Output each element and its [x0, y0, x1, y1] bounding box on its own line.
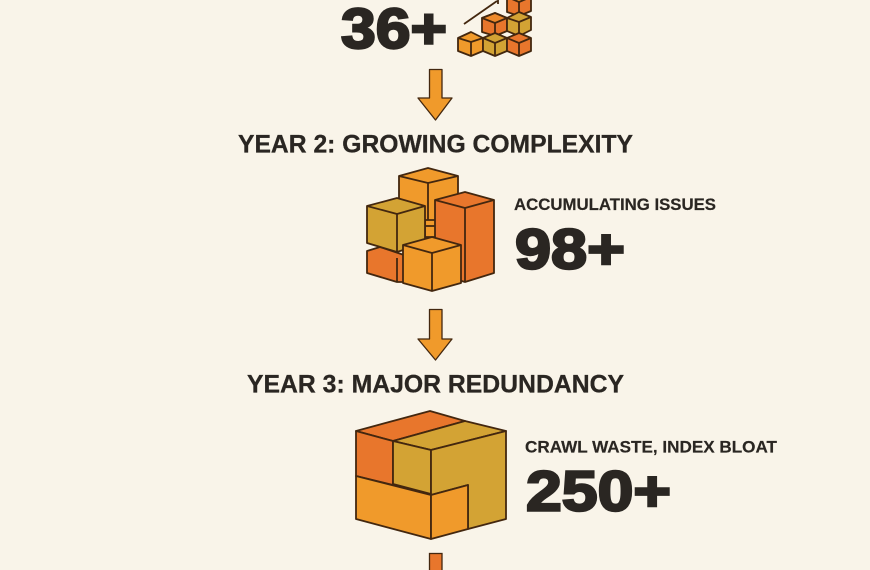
icon: small stacked cubes with growth arrow — [458, 0, 531, 56]
heading: year 2: YEAR 2: GROWING COMPLEXITY — [238, 130, 633, 158]
arrow: continuing below — [430, 554, 442, 570]
arrow: year 2 to year 3 — [418, 310, 452, 360]
year 3 count: 250+ — [526, 460, 671, 524]
icon: cluster of cubes — [367, 168, 494, 291]
arrow: year 1 to year 2 — [418, 70, 452, 120]
year 2 count: 98+ — [515, 218, 625, 282]
heading: year 3: YEAR 3: MAJOR REDUNDANCY — [247, 370, 624, 398]
icon: large consolidated cube — [356, 411, 506, 539]
label: crawl waste, index bloat: CRAWL WASTE, INDEX BLOAT — [525, 438, 778, 456]
label: accumulating issues: ACCUMULATING ISSUES — [514, 195, 716, 214]
